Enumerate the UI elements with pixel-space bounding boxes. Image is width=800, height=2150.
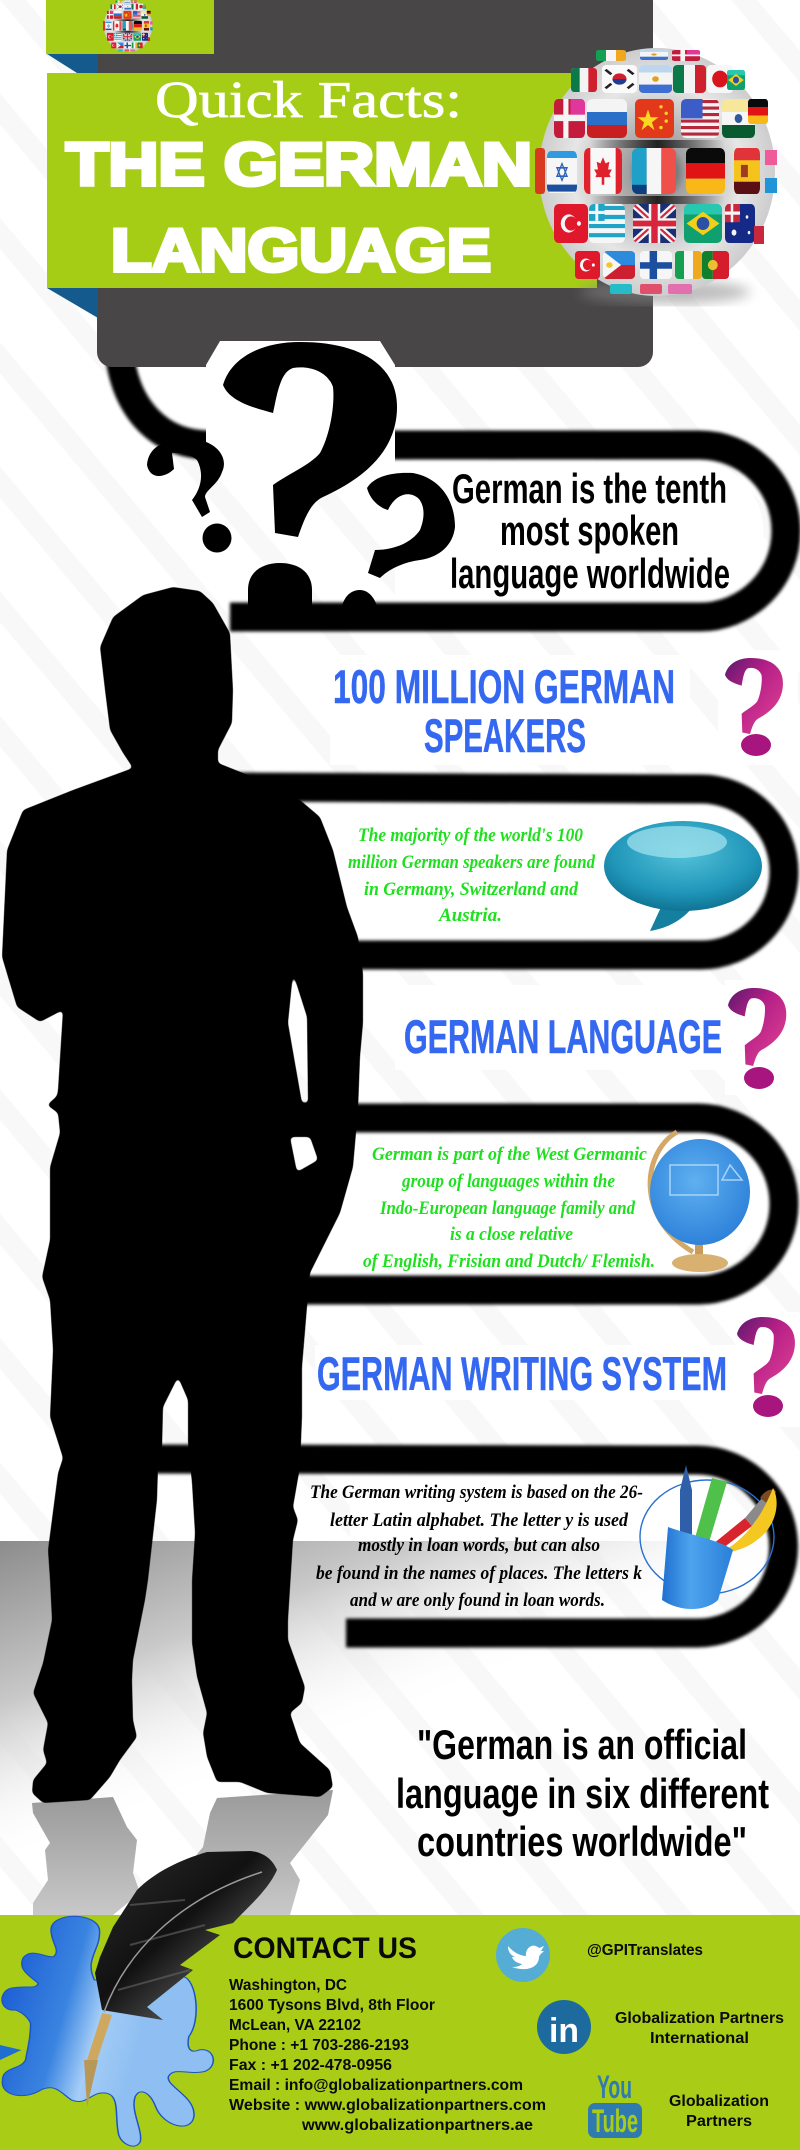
- twitter handle: @GPITranslates: [587, 1942, 703, 1959]
- majority text: The majority of the world's 100: [358, 825, 583, 846]
- ribbon fold bottom: [47, 288, 98, 318]
- linkedin label: International: [650, 2030, 749, 2047]
- contact details: [229, 1977, 546, 2134]
- majority text: Austria.: [438, 905, 502, 926]
- icon: pen cup: [640, 1465, 777, 1609]
- west germanic text: of English, Frisian and Dutch/ Flemish.: [363, 1251, 655, 1272]
- contact details: Email : info@globalizationpartners.com: [229, 2077, 523, 2094]
- writing system text: letter Latin alphabet. The letter y is used: [330, 1510, 628, 1531]
- serpentine black path: [119, 350, 786, 1633]
- heading: 100 million german speakers: [333, 660, 675, 762]
- contact details: Washington, DC: [229, 1977, 347, 1994]
- silhouette floor reflection: [32, 1790, 333, 1915]
- majority text: in Germany, Switzerland and: [364, 879, 578, 900]
- writing system text: The German writing system is based on the 26-: [310, 1482, 643, 1503]
- fact 1 text: most spoken: [500, 507, 679, 554]
- quote text: [396, 1721, 769, 1865]
- ribbon fold top: [47, 54, 98, 73]
- contact details: Website : www.globalizationpartners.com: [229, 2097, 546, 2114]
- question mark dots on the bar: [248, 563, 377, 610]
- west germanic text: Indo-European language family and: [379, 1198, 635, 1219]
- big black question mark: [223, 342, 397, 537]
- icon: linkedin: in: [549, 2012, 579, 2050]
- contact details: 1600 Tysons Blvd, 8th Floor: [229, 1997, 435, 2014]
- icon: magenta question mark 1: [725, 658, 783, 756]
- youtube label: [669, 2093, 769, 2130]
- icon: ink splash: [0, 1916, 213, 2146]
- title: the german: THE GERMAN: [66, 131, 532, 198]
- small globe icon: [103, 0, 153, 52]
- contact heading: CONTACT US: [233, 1932, 417, 1965]
- writing system text: and w are only found in loan words.: [350, 1590, 605, 1611]
- writing system text: [310, 1482, 643, 1611]
- west germanic text: is a close relative: [450, 1224, 574, 1245]
- icon: youtube: You: [597, 2069, 632, 2105]
- fact 1 text: [450, 465, 730, 597]
- west germanic text: German is part of the West Germanic: [372, 1144, 648, 1165]
- man silhouette: [2, 587, 363, 1803]
- writing system text: be found in the names of places. The letters k: [316, 1563, 642, 1584]
- right small question mark: [367, 473, 455, 578]
- floor gradient: [0, 1541, 800, 1915]
- contact details: McLean, VA 22102: [229, 2017, 361, 2034]
- west germanic text: [363, 1144, 655, 1272]
- majority text: [348, 825, 595, 926]
- majority text: million German speakers are found: [348, 852, 595, 873]
- icon: desk globe: [650, 1132, 750, 1272]
- youtube label: Partners: [686, 2113, 752, 2130]
- linkedin label: [615, 2010, 784, 2047]
- contact details: www.globalizationpartners.ae: [301, 2117, 533, 2134]
- icon: youtube: [588, 2069, 642, 2139]
- icon: quill feather: [84, 1851, 277, 2107]
- icon: magenta question mark 3: [737, 1317, 795, 1417]
- green title banner: [47, 73, 597, 288]
- heading: 100 million german speakers: SPEAKERS: [424, 709, 586, 762]
- title: quick facts: Quick Facts:: [155, 72, 462, 129]
- left small question mark: [147, 440, 232, 552]
- icon: magenta question mark 2: [728, 988, 786, 1089]
- globe drop shadow: [580, 280, 750, 304]
- icon: speech bubble: [604, 821, 762, 931]
- white box behind question marks: [206, 341, 395, 478]
- white panels behind the headings: [300, 460, 800, 1541]
- footer band: [0, 1915, 800, 2150]
- icon: twitter: [496, 1928, 550, 1982]
- title: language: LANGUAGE: [111, 217, 491, 284]
- header dark panel: [97, 0, 653, 367]
- youtube label: Globalization: [669, 2093, 769, 2110]
- icon: linkedin: [537, 2000, 591, 2054]
- flag globe: [535, 48, 777, 296]
- top green tab: [46, 0, 214, 54]
- contact details: Fax : +1 202-478-0956: [229, 2057, 392, 2074]
- contact details: Phone : +1 703-286-2193: [229, 2037, 409, 2054]
- writing system text: mostly in loan words, but can also: [358, 1535, 600, 1556]
- linkedin label: Globalization Partners: [615, 2010, 784, 2027]
- icon: youtube: Tube: [592, 2103, 638, 2139]
- west germanic text: group of languages within the: [401, 1171, 616, 1192]
